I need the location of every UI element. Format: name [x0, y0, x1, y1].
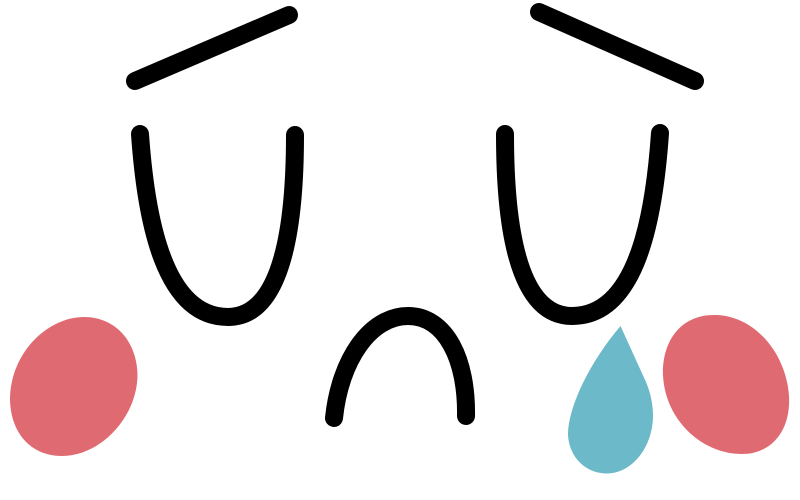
- right cheek: [663, 315, 789, 454]
- left cheek: [10, 317, 138, 456]
- right eyebrow: [539, 12, 695, 81]
- left eyebrow: [135, 15, 289, 81]
- right eye: [505, 133, 660, 316]
- left eye: [140, 134, 295, 317]
- tear drop: [568, 326, 653, 474]
- mouth: [334, 316, 466, 418]
